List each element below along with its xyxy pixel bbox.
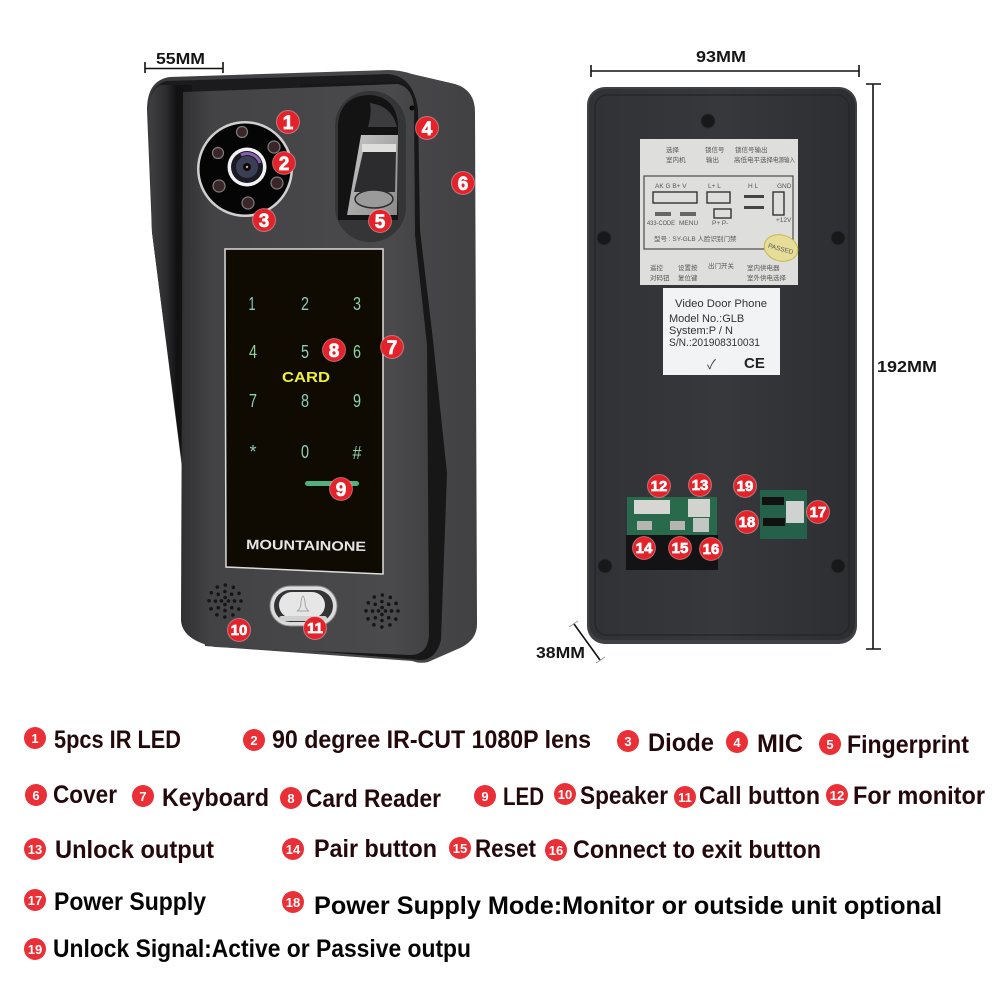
- microphone hole: [410, 106, 414, 110]
- legend row 3: Reset: [475, 835, 537, 863]
- card label: CARD: [282, 369, 330, 386]
- legend row 5: Unlock Signal:Active or Passive outpu: [53, 935, 471, 963]
- dimension: 38mm: 38MM: [536, 645, 585, 662]
- keypad digits: 7: [249, 391, 257, 411]
- touch screen panel: [225, 249, 383, 574]
- wiring diagram sticker: 型号 : SY-GLB 人脸识别门禁: [654, 234, 737, 243]
- camera module: [197, 121, 293, 217]
- wiring diagram sticker: H L: [748, 183, 758, 190]
- callout badges on product photo: 6: [458, 174, 468, 195]
- callout badges on product photo: 4: [422, 119, 433, 140]
- dimension: 55mm: [145, 51, 223, 73]
- text: 14: [636, 540, 653, 557]
- legend row 3: Unlock output: [55, 836, 215, 864]
- hood interior: [149, 74, 416, 500]
- fingerprint reader: [335, 91, 406, 242]
- wiring diagram sticker: MENU: [679, 220, 698, 227]
- legend row 2: 12: [830, 788, 844, 803]
- front unit: door station: [147, 70, 477, 663]
- dimension: 55mm: 55MM: [156, 51, 205, 68]
- legend row 4: 18: [286, 895, 300, 910]
- left circuit board: [626, 497, 718, 570]
- callout badges on product photo: 1: [283, 113, 294, 134]
- keypad digits: #: [352, 443, 362, 463]
- legend row 3: Connect to exit button: [573, 836, 821, 864]
- legend row 1: 2: [250, 733, 258, 748]
- dimension: 93mm: [591, 49, 859, 77]
- text: 17: [810, 504, 826, 521]
- legend row 1: Fingerprint: [847, 731, 970, 759]
- text: 16: [703, 541, 719, 558]
- keypad digits: 5: [301, 342, 309, 362]
- legend row 2: [25, 781, 985, 813]
- legend row 4: Power Supply Mode:Monitor or outside unit optional: [314, 892, 942, 920]
- wiring diagram sticker: 出门开关: [708, 261, 734, 270]
- text: 19: [737, 478, 753, 495]
- model label: [663, 288, 780, 375]
- wiring diagram sticker: 选择: [666, 145, 680, 154]
- keypad digits: 2: [301, 294, 309, 314]
- faceplate: [181, 84, 429, 655]
- model label: ✓: [707, 357, 716, 372]
- keypad digits: 1: [248, 294, 256, 314]
- brand name: MOUNTAINONE: [246, 537, 366, 554]
- screws: [597, 114, 845, 573]
- legend row 1: MIC: [757, 730, 803, 758]
- dimension: 192mm: [866, 84, 937, 649]
- wiring diagram sticker: 室内供电器: [747, 263, 780, 272]
- callout badges on product photo: 9: [336, 480, 346, 501]
- wiring diagram sticker: [640, 139, 801, 285]
- keypad digits: 0: [301, 442, 309, 462]
- legend row 2: LED: [503, 783, 544, 811]
- speaker grille right: [366, 595, 398, 627]
- legend row 4: Power Supply: [54, 888, 206, 916]
- legend row 4: [24, 888, 942, 920]
- back housing: [587, 87, 857, 644]
- callout badges on product photo: 3: [259, 211, 269, 232]
- legend row 1: 5pcs IR LED: [54, 726, 181, 754]
- legend row 2: 7: [139, 789, 147, 804]
- right circuit board: [760, 490, 807, 539]
- back unit: [587, 87, 857, 644]
- text: 12: [651, 478, 667, 495]
- legend row 1: 3: [624, 734, 632, 749]
- model label: Model No.:GLB: [669, 313, 744, 325]
- legend row 2: 10: [558, 787, 572, 802]
- legend row 5: 19: [28, 942, 42, 957]
- keypad digits: 4: [249, 342, 257, 362]
- keypad digits: 8: [301, 391, 309, 411]
- LED bar: [305, 481, 359, 486]
- wiring diagram sticker: 对码钮: [650, 273, 670, 282]
- text: 10: [231, 622, 247, 639]
- wiring diagram sticker: L+ L: [708, 183, 721, 190]
- wiring diagram sticker: 锁信号: [705, 145, 725, 154]
- wiring diagram sticker: 锁信号输出: [735, 145, 768, 154]
- model label: S/N.:201908310031: [669, 337, 760, 349]
- wiring diagram sticker: 433-CODE: [647, 220, 676, 227]
- legend row 2: Speaker: [580, 782, 668, 810]
- legend row 1: 4: [733, 735, 741, 750]
- wiring diagram sticker: 遥控: [650, 263, 664, 272]
- callout badges on product photo: [252, 110, 474, 501]
- legend row 3: 13: [28, 842, 42, 857]
- wiring diagram sticker: 室内机: [666, 155, 686, 164]
- dark rim: [300, 82, 447, 660]
- legend row 1: [24, 726, 970, 759]
- text: 13: [692, 477, 708, 494]
- callout badges on product photo: 5: [375, 212, 386, 233]
- text: 15: [672, 540, 688, 557]
- text: 11: [307, 620, 323, 637]
- legend row 2: Call button: [699, 782, 820, 810]
- legend row 2: 8: [287, 791, 295, 806]
- legend row 2: Card Reader: [306, 785, 441, 813]
- legend row 2: 6: [32, 788, 40, 803]
- wiring diagram sticker: GND: [777, 183, 792, 190]
- legend row 3: [24, 835, 821, 864]
- legend row 2: For monitor: [853, 782, 985, 810]
- keypad digits: [248, 294, 362, 463]
- dimension: 192mm: 192MM: [877, 359, 937, 376]
- legend row 2: Cover: [53, 781, 117, 809]
- model label: Video Door Phone: [675, 298, 767, 310]
- keypad digits: 3: [353, 294, 361, 314]
- wiring diagram sticker: 设置按: [678, 263, 698, 272]
- legend row 3: 16: [549, 843, 563, 858]
- keypad digits: 9: [353, 391, 361, 411]
- legend row 1: 5: [826, 737, 834, 752]
- legend row 2: Keyboard: [162, 784, 269, 812]
- text: 18: [739, 514, 755, 531]
- legend row 1: 90 degree IR-CUT 1080P lens: [272, 726, 591, 754]
- wiring diagram sticker: +12V: [776, 217, 792, 224]
- callout badges on product photo: 8: [329, 341, 339, 362]
- wiring diagram sticker: P+ P-: [712, 220, 728, 227]
- speaker grille left: [209, 585, 241, 617]
- legend row 1: 1: [31, 731, 39, 746]
- wiring diagram sticker: AK G B+ V: [655, 183, 687, 190]
- wiring diagram sticker: PASSED: [767, 243, 794, 256]
- wiring diagram sticker: 复位键: [678, 273, 698, 282]
- wiring diagram sticker: 高低电平选择: [734, 155, 774, 164]
- model label: System:P / N: [669, 325, 733, 337]
- weather cover: [147, 70, 477, 663]
- keypad digits: 6: [353, 342, 361, 362]
- legend row 3: 15: [453, 841, 467, 856]
- keypad digits: *: [249, 442, 257, 462]
- wiring diagram sticker: 室外供电选择: [747, 273, 786, 282]
- legend row 4: 17: [28, 893, 42, 908]
- legend row 2: 11: [678, 790, 692, 805]
- legend row 2: 9: [481, 789, 489, 804]
- callout badges on product photo: 7: [387, 338, 397, 359]
- callout badges on product photo: 2: [279, 154, 289, 175]
- model label: CE: [744, 355, 765, 372]
- legend row 3: Pair button: [314, 835, 437, 863]
- dimension: 38mm: [536, 621, 605, 663]
- legend list: [24, 726, 985, 963]
- dimension: 93mm: 93MM: [696, 49, 746, 66]
- wiring diagram sticker: 输出: [706, 155, 719, 164]
- call button: [270, 586, 337, 626]
- wiring diagram sticker: 电源输入: [773, 155, 795, 164]
- legend row 3: 14: [286, 842, 301, 857]
- legend row 1: Diode: [648, 729, 714, 757]
